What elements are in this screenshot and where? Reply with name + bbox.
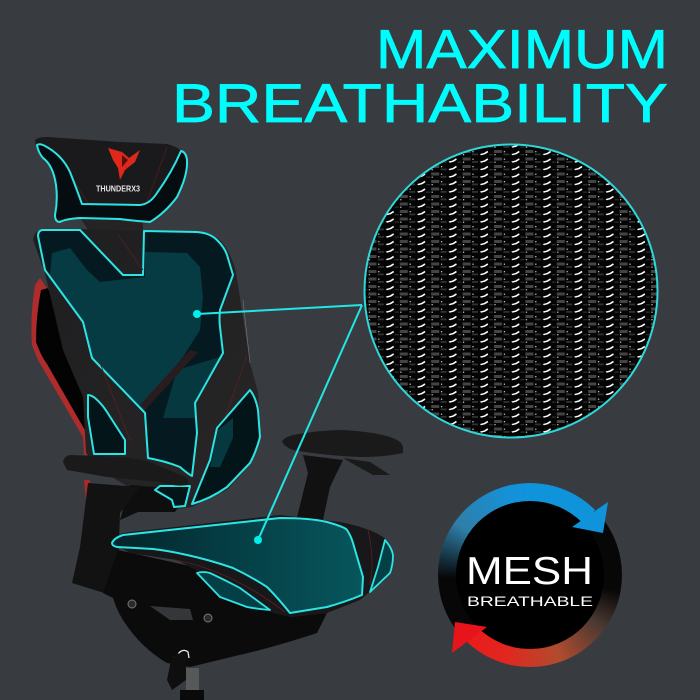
headrest (35, 137, 187, 222)
badge text: BREATHABLE (467, 593, 593, 609)
magnified mesh circle (364, 144, 658, 438)
seat mechanism (103, 550, 327, 700)
back side panels (88, 390, 260, 507)
backrest (33, 229, 261, 510)
right armrest (282, 430, 403, 520)
callout line: backrest (193, 305, 362, 318)
red rear shell (31, 278, 92, 515)
chair illustration (31, 137, 403, 700)
icon: red arrowhead (452, 622, 487, 653)
icon: blue arrowhead (572, 502, 608, 533)
logo: THUNDERX3 (96, 184, 140, 194)
headrest neck (80, 218, 143, 280)
badge text: MESH (466, 550, 593, 593)
title: BREATHABILITY (172, 72, 668, 134)
mesh breathable badge (438, 483, 622, 667)
seat (112, 515, 393, 617)
title (172, 18, 668, 134)
badge text (466, 550, 593, 609)
logo (96, 148, 140, 194)
callout line: seat (254, 305, 362, 544)
left armrest (63, 455, 189, 597)
under-back frame (120, 485, 190, 520)
back mesh light area (50, 248, 203, 413)
title: MAXIMUM (376, 18, 668, 80)
